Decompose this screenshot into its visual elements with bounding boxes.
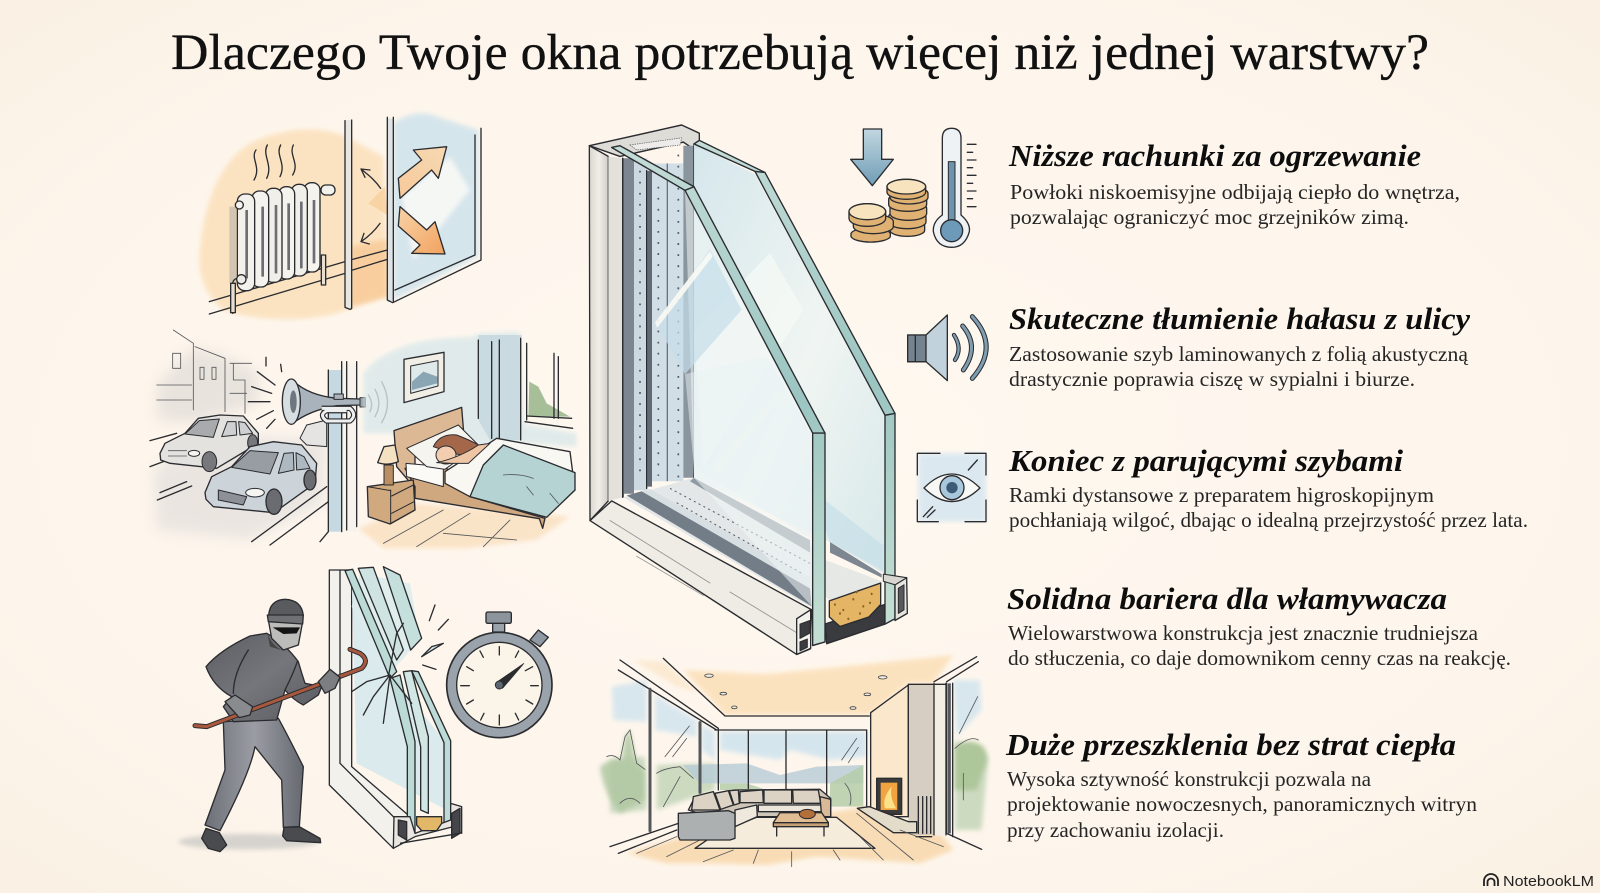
burglar torso [206, 633, 322, 722]
flying shards [422, 643, 443, 657]
picture [404, 352, 444, 403]
street wash [157, 347, 260, 423]
sound burst lines [248, 357, 282, 428]
coin stack right [887, 179, 928, 236]
glass rear pane surface [694, 144, 885, 574]
window panes [345, 120, 352, 309]
front glass edge [612, 146, 825, 646]
wall section [320, 362, 357, 542]
stopwatch [447, 612, 552, 738]
car 2 [205, 442, 317, 514]
coffee table [773, 809, 828, 836]
benefit 1: heating: pozwalając ograniczyć moc grzejników zimą. [1010, 205, 1409, 229]
illustration: cross-section of insulated glass unit [589, 125, 907, 654]
title: Dlaczego Twoje okna potrzebują więcej niż jednej warstwy? [171, 25, 1429, 81]
air horn [282, 379, 365, 424]
right profile end [895, 578, 907, 621]
floor wash [627, 807, 953, 865]
sleeping woman [433, 435, 490, 464]
warm wash [199, 129, 388, 319]
benefit 4: burglary: do stłuczenia, co daje domownikom cenny czas na reakcję. [1008, 646, 1511, 670]
heading: Solidna bariera dla włamywacza [1007, 581, 1447, 616]
frame outline back [589, 125, 699, 156]
hearth [857, 807, 917, 833]
foam spacer section [825, 604, 885, 644]
illustration: street noise and quiet bedroom [150, 330, 577, 548]
burglar head [267, 599, 303, 651]
radiator [229, 183, 335, 313]
text: Zastosowanie szyb laminowanych z folią akustyczną [1009, 342, 1468, 366]
fireplace wall [871, 685, 908, 817]
text: Powłoki niskoemisyjne odbijają ciepło do wnętrza, [1010, 180, 1460, 204]
tree outlines [607, 730, 978, 805]
cracks [352, 623, 412, 723]
burglar shoes [202, 828, 227, 852]
cold glass wash [393, 113, 478, 300]
benefit 3: condensation [1008, 443, 1528, 532]
heading: Koniec z parującymi szybami [1008, 443, 1403, 478]
sofa [678, 789, 831, 840]
upper glass edges [345, 569, 397, 678]
nightstand and lamp [367, 445, 415, 524]
crowbar [195, 649, 365, 727]
background car [300, 420, 327, 447]
icon: arrow, coins and thermometer [849, 128, 976, 247]
coin stack left [849, 204, 893, 242]
icon: clear-view eye [917, 453, 986, 522]
window mullions [610, 657, 982, 853]
floor lines [209, 250, 387, 314]
rear glass edge [694, 140, 895, 624]
bedroom floor boards [383, 510, 517, 547]
thermometer [933, 128, 976, 247]
fire tools [916, 797, 932, 837]
illustration: panoramic living room [600, 655, 988, 867]
small reflected arrows [361, 169, 381, 244]
benefit 1: heating [1008, 138, 1460, 229]
burglar legs [205, 718, 303, 831]
ground shadow [178, 834, 318, 850]
profile end [393, 803, 462, 848]
recessed lights [705, 674, 887, 709]
curtain [478, 335, 527, 440]
gloves [225, 695, 253, 718]
inner frame stripes [623, 158, 634, 494]
logo [1484, 874, 1498, 886]
ceiling wash [683, 655, 953, 715]
illustration: burglar attacking triple glazing [178, 567, 552, 852]
glass front pane surface highlights [685, 190, 815, 610]
benefit 5: panoramic glazing: projektowanie nowoczesnych, panoramicznych witryn [1007, 792, 1477, 816]
road lines [150, 433, 328, 545]
text: Ramki dystansowe z preparatem higroskopijnym [1009, 483, 1434, 507]
bed [394, 407, 575, 528]
heading: Duże przeszklenia bez strat ciepła [1005, 727, 1456, 762]
arrow down [851, 129, 893, 186]
benefit 5: panoramic glazing: przy zachowaniu izolacji. [1007, 818, 1224, 842]
lower glass edges [390, 675, 415, 837]
heat waves [254, 145, 295, 180]
fireplace [877, 778, 902, 814]
heading: Niższe rachunki za ogrzewanie [1008, 138, 1421, 173]
benefit 3: condensation: pochłaniają wilgoć, dbając o idealną przejrzystość przez lata. [1009, 508, 1528, 532]
left frame strip [589, 146, 608, 521]
large arrow up [398, 147, 447, 198]
benefit 2: noise: drastycznie poprawia ciszę w sypialni i biurze. [1009, 367, 1415, 391]
NotebookLM badge [1484, 873, 1594, 890]
wordmark: NotebookLM [1503, 873, 1594, 890]
benefit 5: panoramic glazing [1005, 727, 1477, 842]
text: Wysoka sztywność konstrukcji pozwala na [1007, 767, 1371, 791]
car 1 [160, 415, 258, 472]
buildings [157, 330, 252, 413]
sky and landscape [612, 680, 982, 760]
bedroom wash [363, 332, 577, 447]
text: Wielowarstwowa konstrukcja jest znacznie trudniejsza [1008, 621, 1478, 645]
icon: speaker [908, 315, 986, 381]
heading: Skuteczne tłumienie hałasu z ulicy [1009, 301, 1470, 336]
window triple glazing [329, 567, 462, 848]
illustration: radiator and low-e window [199, 113, 481, 319]
benefit 4: burglary [1007, 581, 1511, 670]
bottom sill [590, 501, 812, 654]
rug [695, 817, 875, 848]
sound waves [368, 382, 387, 423]
garden window [525, 353, 573, 428]
benefit 2: noise [1009, 301, 1470, 391]
profile end left [797, 610, 811, 654]
glass reflections [663, 697, 978, 807]
large arrow down [398, 207, 445, 254]
